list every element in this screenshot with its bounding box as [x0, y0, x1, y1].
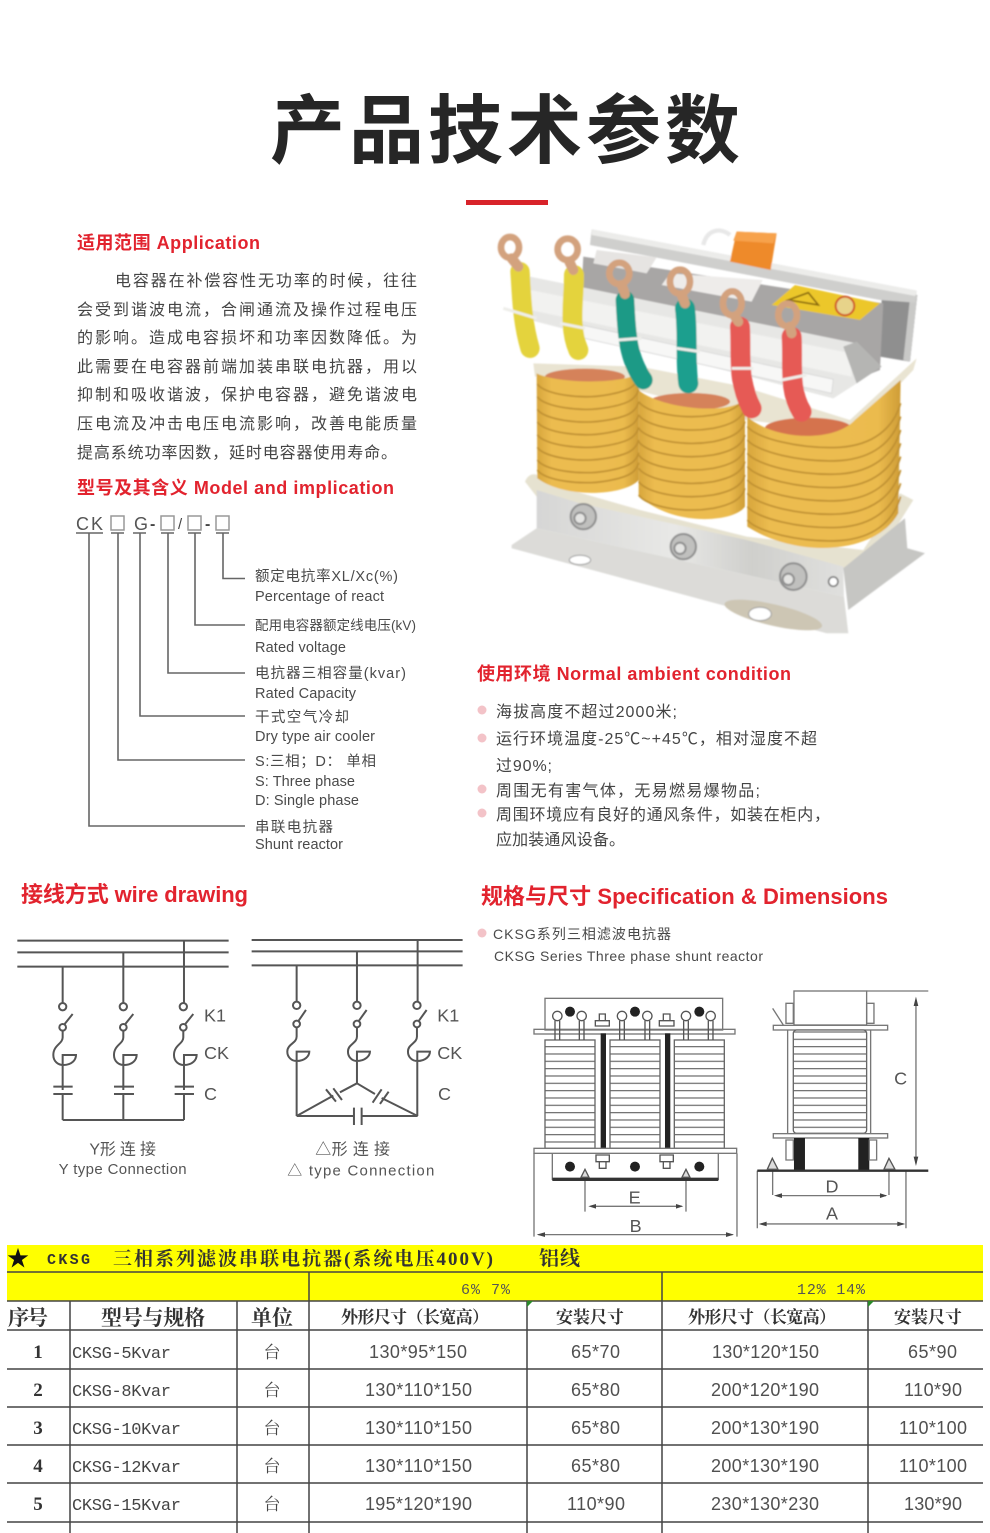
row 5: 5	[33, 1494, 43, 1515]
diagram: delta type connection: △ type Connection	[287, 1162, 434, 1179]
bullet list: 应加装通风设备。	[496, 830, 625, 849]
white busbar	[580, 325, 833, 393]
row 3: 200*130*190	[711, 1418, 819, 1438]
table header row: 安装尺寸	[894, 1307, 962, 1327]
nameplates	[593, 250, 657, 273]
cables	[520, 272, 802, 412]
heading: specification: 规格与尺寸 Specification & Dimensions	[481, 884, 888, 909]
bullet list	[478, 703, 830, 849]
table header row: 安装尺寸	[556, 1307, 624, 1327]
table header row: 型号与规格	[101, 1306, 205, 1330]
diagram: Y type connection: CK	[204, 1043, 229, 1063]
row 4: 200*130*190	[711, 1456, 819, 1476]
bullet list: 运行环境温度-25℃~+45℃，相对湿度不超	[496, 729, 817, 748]
diagram: Y type connection: C	[204, 1084, 217, 1104]
row 2: CKSG-8Kvar	[72, 1383, 171, 1402]
row 4: 65*80	[571, 1456, 620, 1476]
text block: application	[77, 272, 417, 462]
row 3: 台	[264, 1419, 280, 1440]
bullet list: 周围无有害气体，无易燃易爆物品;	[496, 781, 760, 800]
mounting plate	[537, 490, 844, 597]
model legend: Dry type air cooler	[255, 729, 375, 745]
title: 产品技术参数	[270, 89, 740, 173]
text block: application: 提高系统功率因数，延时电容器使用寿命。	[77, 444, 397, 462]
diagram: side view: C	[894, 1069, 907, 1089]
diagram: side view	[757, 991, 928, 1228]
coil left	[537, 373, 639, 493]
row 2: 110*90	[904, 1380, 962, 1400]
model legend: S:三相；D： 单相	[255, 753, 376, 770]
model leader lines	[76, 533, 245, 826]
row 2: 65*80	[571, 1380, 620, 1400]
row 1: 130*120*150	[712, 1342, 819, 1362]
row 3: 110*100	[899, 1418, 967, 1438]
white wire loop	[703, 231, 730, 245]
diagram: delta type connection: C	[438, 1084, 451, 1104]
model legend: Percentage of react	[255, 589, 384, 605]
table header row: 单位	[251, 1306, 293, 1330]
diagram: front view: E	[629, 1187, 641, 1207]
row 2: 200*120*190	[711, 1380, 819, 1400]
model code: -	[150, 516, 155, 533]
row 4: 4	[33, 1456, 43, 1477]
diagram: delta type connection: △形 连 接	[315, 1141, 390, 1159]
diagram: side view: A	[826, 1203, 838, 1223]
diagram: Y type connection	[17, 941, 229, 1178]
row 5: 110*90	[567, 1494, 625, 1514]
text block: application: 压电流及冲击电压电流影响，改善电能质量	[77, 415, 417, 433]
row 3	[33, 1418, 967, 1440]
text block: application: 会受到谐波电流，合闸通流及操作过程电压	[77, 301, 417, 319]
coil windings	[537, 377, 901, 541]
heading: application: 适用范围 Application	[77, 233, 260, 253]
heading: wire drawing: 接线方式 wire drawing	[21, 882, 248, 907]
core	[580, 257, 883, 383]
model legend: 额定电抗率XL/Xc(%)	[255, 568, 398, 585]
foot flange	[512, 528, 848, 633]
bullet list: 海拔高度不超过2000米;	[496, 703, 677, 721]
coil middle	[639, 390, 745, 519]
row 1: 1	[33, 1342, 43, 1363]
heading: model: 型号及其含义 Model and implication	[77, 477, 394, 498]
text block: application: 此需要在电容器前端加装串联电抗器，用以	[77, 358, 417, 376]
table grid	[7, 1272, 983, 1533]
diagram: delta type connection: K1	[437, 1006, 459, 1026]
bolts and holes	[571, 504, 807, 590]
row 4: 台	[264, 1457, 280, 1478]
copper lugs	[501, 237, 797, 326]
row 3: 65*80	[571, 1418, 620, 1438]
table header row: 外形尺寸（长宽高）	[341, 1307, 489, 1327]
table title band: 12% 14%	[797, 1282, 866, 1299]
title accent bar	[466, 200, 548, 205]
panel: application	[77, 233, 417, 462]
upper insulating sheet	[533, 358, 917, 433]
table header row	[8, 1306, 962, 1330]
diagram: delta type connection	[252, 940, 463, 1179]
table title band	[7, 1245, 983, 1301]
copper tops	[545, 369, 625, 385]
orange connector	[730, 232, 777, 270]
text block: application: 电容器在补偿容性无功率的时候，往往	[115, 272, 417, 290]
note markers	[527, 1301, 874, 1307]
right mounting bracket	[843, 518, 925, 610]
row 4	[33, 1456, 967, 1478]
table title band: 6% 7%	[461, 1282, 511, 1299]
row 5: 230*130*230	[711, 1494, 819, 1514]
diagram: front view	[534, 998, 737, 1237]
diagram: Y type connection: K1	[204, 1006, 226, 1026]
model code	[76, 514, 229, 534]
product photo: three-phase reactor	[501, 229, 925, 637]
row 3: 3	[33, 1418, 43, 1439]
table title band: 铝线	[539, 1247, 580, 1270]
model legend	[255, 568, 416, 853]
lower insulating sheet	[525, 474, 913, 570]
row 2	[33, 1380, 962, 1402]
row 4: 110*100	[899, 1456, 967, 1476]
cable ties	[503, 308, 807, 380]
series description: CKSG系列三相滤波电抗器	[493, 926, 671, 942]
panel: specification and dimensions	[478, 884, 928, 1237]
row 5	[33, 1494, 962, 1516]
text block: application: 的影响。造成电容损坏和功率因数降低。为	[77, 329, 417, 347]
model code: -	[205, 516, 210, 533]
table title band: 三相系列滤波串联电抗器(系统电压400V)	[113, 1247, 493, 1270]
bullet list: 周围环境应有良好的通风条件，如装在柜内，	[496, 805, 830, 824]
table header row: 外形尺寸（长宽高）	[688, 1307, 836, 1327]
panel: model and implication	[76, 477, 416, 853]
model legend: 干式空气冷却	[255, 709, 349, 726]
bullet list: 过90%;	[496, 757, 552, 775]
diagram: Y type connection: Y形 连 接	[89, 1141, 156, 1159]
row 1: 65*70	[571, 1342, 620, 1362]
row 2: 2	[33, 1380, 43, 1401]
model legend: 电抗器三相容量(kvar)	[255, 665, 406, 682]
row 3: 130*110*150	[365, 1418, 472, 1438]
table header row: 序号	[8, 1306, 48, 1330]
table title band: ★	[7, 1246, 29, 1271]
row 2: 130*110*150	[365, 1380, 472, 1400]
diagram: side view: D	[825, 1177, 838, 1197]
heading: ambient: 使用环境 Normal ambient condition	[477, 663, 791, 684]
row 5: 台	[264, 1495, 280, 1516]
table: CKSG series specifications	[7, 1245, 983, 1533]
model legend: Rated voltage	[255, 640, 346, 656]
model legend: Shunt reactor	[255, 837, 343, 853]
model legend: 串联电抗器	[255, 819, 334, 836]
row 5: CKSG-15Kvar	[72, 1497, 181, 1516]
row 1: CKSG-5Kvar	[72, 1345, 171, 1364]
row 1	[33, 1342, 957, 1364]
row 1: 台	[264, 1343, 280, 1364]
right upright	[880, 295, 917, 362]
panel: wire drawing	[17, 882, 463, 1179]
row 4: 130*110*150	[365, 1456, 472, 1476]
row 1: 65*90	[908, 1342, 957, 1362]
model legend: D: Single phase	[255, 793, 359, 809]
model code: /	[178, 516, 183, 533]
row 3: CKSG-10Kvar	[72, 1421, 181, 1440]
diagram: delta type connection: CK	[437, 1043, 462, 1063]
series description	[478, 926, 763, 964]
row 5: 130*90	[904, 1494, 962, 1514]
model legend: 配用电容器额定线电压(kV)	[255, 617, 416, 633]
series description: CKSG Series Three phase shunt reactor	[494, 948, 763, 964]
row 1: 130*95*150	[369, 1342, 467, 1362]
text block: application: 抑制和吸收谐波，保护电容器，避免谐波电	[77, 386, 417, 404]
row 4: CKSG-12Kvar	[72, 1459, 181, 1478]
row 2: 台	[264, 1381, 280, 1402]
coil right	[747, 380, 901, 548]
model legend: S: Three phase	[255, 774, 355, 790]
row 5: 195*120*190	[365, 1494, 472, 1514]
model legend: Rated Capacity	[255, 686, 357, 702]
diagram: Y type connection: Y type Connection	[59, 1161, 187, 1178]
diagram: front view: B	[630, 1216, 642, 1236]
panel: ambient condition	[477, 663, 830, 849]
model code: CK	[76, 514, 103, 534]
table title band: CKSG	[47, 1252, 90, 1269]
front bracket	[530, 277, 857, 398]
model code: G	[134, 514, 148, 534]
